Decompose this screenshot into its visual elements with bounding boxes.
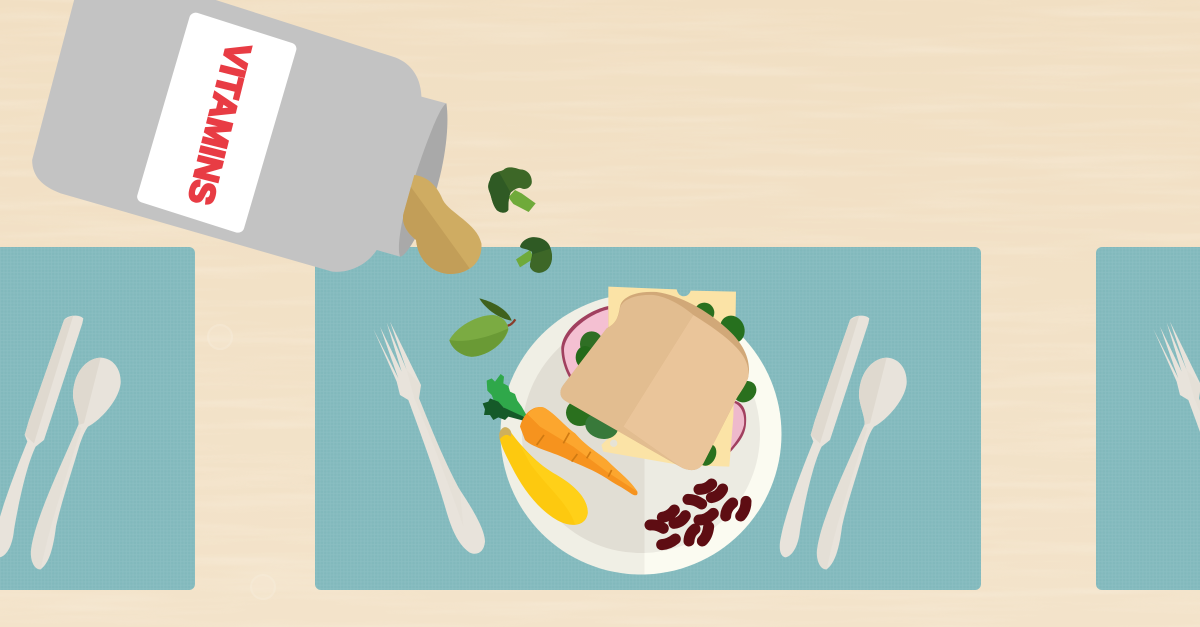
lime with leaf xyxy=(449,298,515,357)
pill bottle xyxy=(32,0,482,280)
centre place setting: fork xyxy=(373,322,485,554)
lettuce and spinach xyxy=(566,303,761,469)
carrot xyxy=(483,374,638,495)
cheese hole xyxy=(610,440,617,447)
centre place setting: spoon xyxy=(817,358,907,569)
broccoli floret 2 xyxy=(516,237,552,273)
sandwich xyxy=(560,287,761,470)
left place setting: knife xyxy=(0,315,83,557)
carrot tops xyxy=(483,374,527,421)
right place setting: fork xyxy=(1153,322,1200,554)
wood knot left xyxy=(208,325,232,349)
label text: VITAMINS xyxy=(180,39,258,209)
placemat: centre xyxy=(315,247,981,590)
squash xyxy=(499,427,588,525)
carrot root xyxy=(520,407,638,495)
label xyxy=(144,19,290,227)
placemat: left xyxy=(0,247,195,590)
ham xyxy=(561,306,746,453)
cheese xyxy=(601,287,736,467)
bottle body xyxy=(32,0,446,272)
left place setting: spoon xyxy=(31,358,121,569)
bread slice xyxy=(560,292,749,470)
placemat: right xyxy=(1096,247,1200,590)
bottle mouth xyxy=(399,103,447,257)
beans xyxy=(650,484,746,545)
centre place setting: knife xyxy=(780,315,869,557)
plate xyxy=(500,294,782,574)
capsule pouring out xyxy=(403,175,482,274)
bottle shapes xyxy=(32,0,482,280)
wood knot bottom xyxy=(251,575,275,599)
broccoli floret 1 xyxy=(488,167,536,213)
